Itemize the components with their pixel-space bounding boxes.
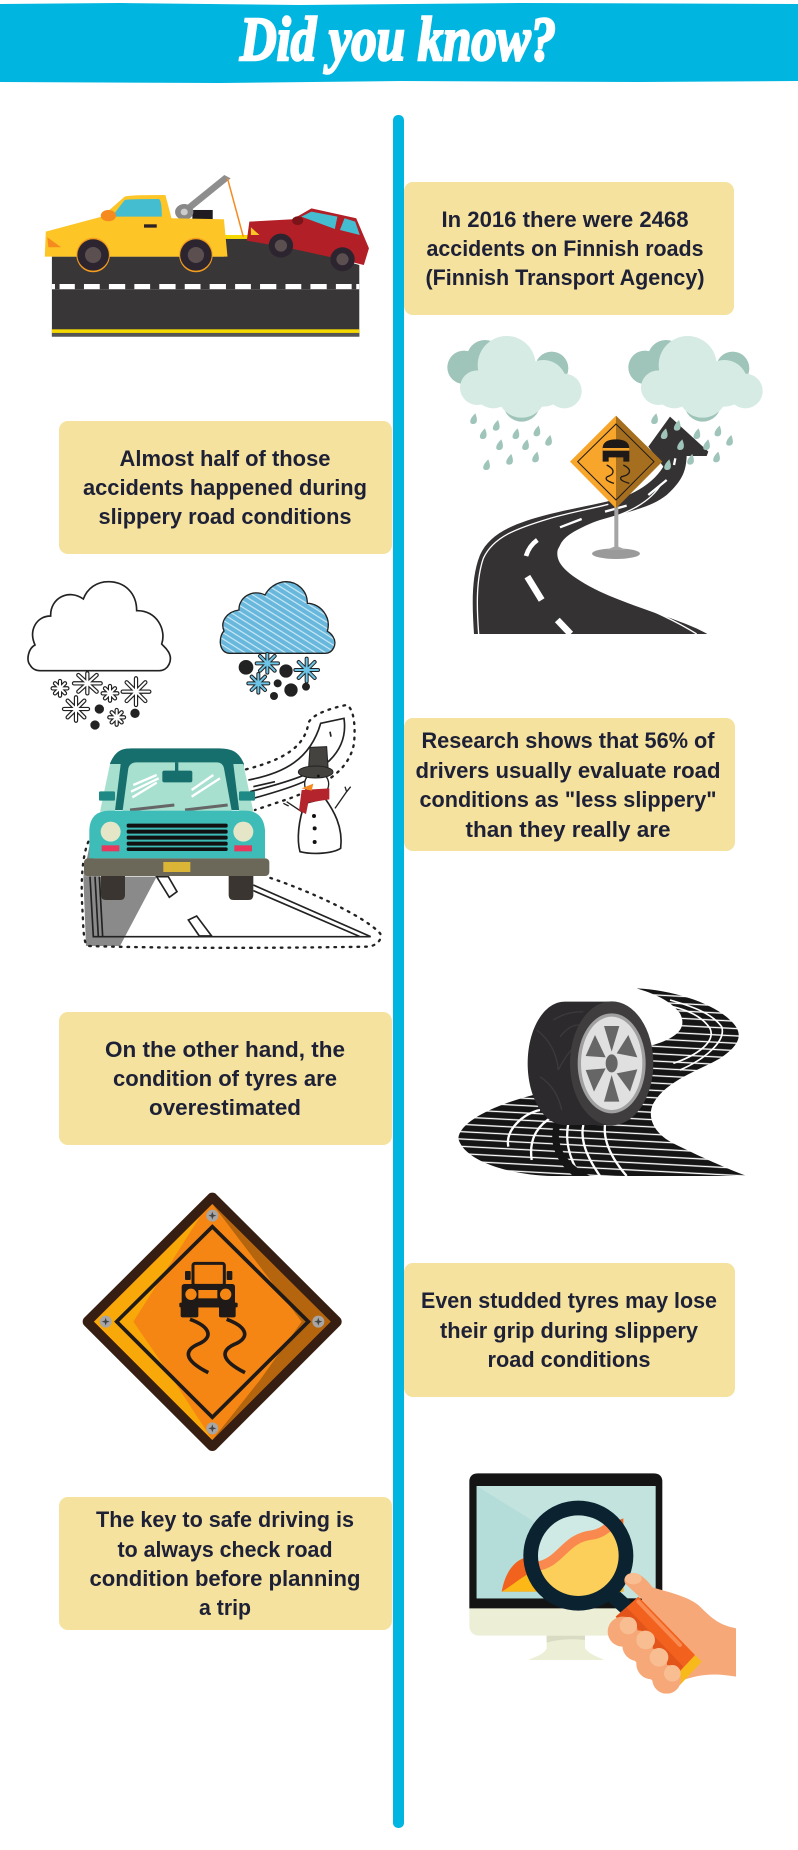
panel: 2468 accidents: accidents on Finnish roads xyxy=(426,236,704,261)
panel: 56% of drivers: Research shows that 56% of xyxy=(422,728,715,753)
panel: studded tyres xyxy=(404,1263,735,1397)
magnifying glass xyxy=(530,1508,637,1617)
slippery road sign on post xyxy=(570,416,662,559)
illustration: rainy winding road with slippery sign xyxy=(447,336,763,634)
header banner xyxy=(0,3,798,83)
sketched road behind car xyxy=(82,705,381,948)
panel: check road condition: a trip xyxy=(199,1595,251,1620)
rain drops xyxy=(470,413,733,470)
title: Did you know? xyxy=(239,6,556,74)
illustration: monitor, magnifying glass and hand xyxy=(469,1473,736,1694)
jeep with skid marks xyxy=(179,1263,245,1373)
handle xyxy=(616,1597,702,1685)
illustration: snow clouds, car and snowman xyxy=(28,582,381,948)
panel: slippery road conditions: Almost half of those xyxy=(120,446,330,471)
panel: tyres overestimated: overestimated xyxy=(149,1095,301,1120)
panel: studded tyres: Even studded tyres may lose xyxy=(421,1288,717,1313)
tread track xyxy=(458,988,747,1176)
blue hatched snow cloud xyxy=(220,582,335,700)
panel: slippery road conditions: accidents happened during xyxy=(83,475,367,500)
panel: studded tyres: their grip during slippery xyxy=(440,1318,699,1343)
panel: tyres overestimated: On the other hand, the xyxy=(105,1037,345,1062)
snowman xyxy=(283,747,351,853)
illustration: tyre and tread marks xyxy=(458,988,747,1176)
panel: 2468 accidents xyxy=(404,182,734,315)
panel: 2468 accidents: (Finnish Transport Agency) xyxy=(426,265,704,290)
screws xyxy=(100,1210,324,1434)
panel: check road condition: condition before planning xyxy=(90,1566,360,1591)
red car xyxy=(247,208,369,271)
teal car xyxy=(84,748,269,900)
panel: tyres overestimated: condition of tyres are xyxy=(113,1066,337,1091)
yellow truck xyxy=(45,195,227,272)
panel: slippery road conditions: slippery road conditions xyxy=(98,504,352,529)
second cloud front xyxy=(641,336,763,418)
hand xyxy=(608,1573,736,1694)
panel: tyres overestimated xyxy=(59,1012,392,1145)
panel: 56% of drivers: than they really are xyxy=(466,817,670,842)
rain clouds xyxy=(447,336,749,422)
tyre xyxy=(528,1001,653,1125)
outlined snow cloud xyxy=(28,582,170,730)
panel: check road condition: The key to safe driving is xyxy=(96,1507,354,1532)
winding road xyxy=(473,417,708,634)
panel: 2468 accidents: In 2016 there were 2468 xyxy=(442,207,688,232)
panel: studded tyres: road conditions xyxy=(488,1347,650,1372)
road xyxy=(52,235,359,337)
panel: slippery road conditions xyxy=(59,421,392,554)
panel: check road condition: to always check road xyxy=(118,1537,332,1562)
panel: 56% of drivers: conditions as "less slippery" xyxy=(420,787,716,812)
timeline bar xyxy=(393,115,404,1828)
panel: check road condition xyxy=(59,1497,392,1630)
computer monitor xyxy=(469,1473,662,1660)
illustration: tow truck pulling a car xyxy=(45,177,369,337)
panel: 56% of drivers xyxy=(404,718,735,851)
tow boom xyxy=(175,177,243,237)
panel: 56% of drivers: drivers usually evaluate road xyxy=(416,758,720,783)
icon: slippery road warning sign xyxy=(88,1198,336,1445)
